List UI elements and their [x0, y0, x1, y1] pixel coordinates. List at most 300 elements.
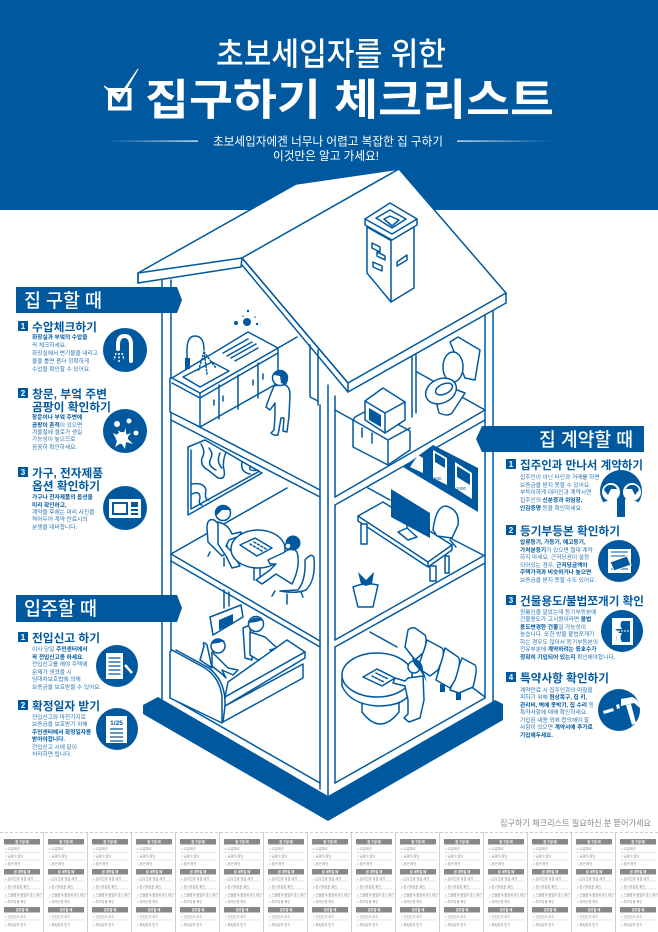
item: 확정일자: 주민센터에서 확정일자를: [32, 728, 91, 736]
tear-off checklist strip: □ 특약사항 확인: [181, 899, 202, 904]
tear-off checklist strip: 입주할 때: [544, 907, 556, 912]
scene: community center counter: [170, 590, 305, 723]
item: 곰팡이 확인: 겨울철에 결로가 생길: [32, 428, 82, 436]
item: 옵션 확인: 찍어두어 계약 만료시의: [32, 515, 88, 523]
tear-off checklist strip: □ 전입신고 하기: [93, 914, 114, 919]
tear-off checklist strip: □ 곰팡이 확인: [137, 854, 155, 858]
tear-off checklist strip: □ 등기부등본 확인: [489, 884, 513, 889]
tear-off checklist strip: □ 옵션 확인: [401, 861, 416, 866]
scene: kitchen: [170, 310, 290, 435]
item: 수압체크하기: 화장실과 부엌의 수압을: [32, 333, 88, 341]
tear-off checklist strip: 집 구할 때: [279, 839, 293, 844]
item: 건물용도: 원룸인줄 알았는데 등기부등본에: [520, 608, 596, 616]
tear-off checklist strip: □ 집주인과 직접 계약: [5, 876, 33, 881]
tear-off checklist strip: □ 건물용도/불법쪼개기 확인: [137, 892, 174, 897]
tear-off checklist strip: □ 수압체크: [225, 846, 240, 851]
tear-off checklist strip: 집 구할 때: [499, 839, 513, 844]
item: 특약사항: 피하기 위해 원상복구, 집 키,: [520, 693, 587, 701]
tear-off checklist strip: □ 곰팡이 확인: [93, 854, 111, 858]
item: 전입신고: 1: [21, 633, 26, 642]
tear-off checklist strip: □ 확정일자 받기: [313, 922, 334, 927]
tear-off checklist strip: □ 확정일자 받기: [577, 922, 598, 927]
tear-off checklist strip: □ 특약사항 확인: [137, 899, 158, 904]
tear-off checklist strip: □ 건물용도/불법쪼개기 확인: [445, 892, 482, 897]
item: 건물용도: 높습니다. 또한 방을 불법쪼개기: [520, 630, 594, 638]
tear-off checklist strip: 입주할 때: [236, 907, 248, 912]
item: 등기부등본: 하지 마세요. 근저당권이 설정: [520, 553, 589, 561]
tear-off checklist strip: □ 특약사항 확인: [93, 899, 114, 904]
tear-off checklist strip: □ 수압체크: [489, 846, 504, 851]
scene: office: 1000: [456, 486, 467, 491]
tear-off checklist strip: □ 확정일자 받기: [181, 922, 202, 927]
tear-off checklist strip: □ 확정일자 받기: [225, 922, 246, 927]
tear-off checklist strip: □ 등기부등본 확인: [533, 884, 557, 889]
tear-off checklist strip: □ 특약사항 확인: [489, 899, 510, 904]
item: 집주인 계약: 집주인이 아닌 타인과 거래를 하면: [520, 473, 600, 481]
tear-off checklist strip: □ 곰팡이 확인: [489, 854, 507, 858]
tear-off checklist strip: □ 옵션 확인: [621, 861, 636, 866]
tear-off checklist strip: □ 건물용도/불법쪼개기 확인: [357, 892, 394, 897]
item: 건물용도: 전유부분에 계약하려는 동호수가: [520, 645, 597, 653]
scene: office: [353, 445, 478, 607]
tear-off checklist strip: □ 옵션 확인: [5, 861, 20, 866]
tear-off checklist strip: 입주할 때: [280, 907, 292, 912]
item: 건물용도: 하는 경우도 많아서 등기부등본의: [520, 638, 598, 646]
tear-off checklist strip: □ 확정일자 받기: [93, 922, 114, 927]
item: 건물용도: 용도변경한 건물일 가능성이: [520, 623, 586, 631]
tear-off checklist strip: □ 전입신고 하기: [533, 914, 554, 919]
tear-off checklist strip: 입주할 때: [60, 907, 72, 912]
tear-off checklist strip: □ 집주인과 직접 계약: [357, 876, 385, 881]
tear-off checklist strip: □ 특약사항 확인: [5, 899, 26, 904]
item: 곰팡이 확인: 곰팡이 확인하기: [32, 400, 111, 414]
tear-off checklist strip: □ 수압체크: [137, 846, 152, 851]
tear-off checklist strip: □ 집주인과 직접 계약: [401, 876, 429, 881]
tear-off checklist strip: □ 옵션 확인: [93, 861, 108, 866]
tear-off checklist strip: □ 등기부등본 확인: [49, 884, 73, 889]
item: 확정일자: 받아야합니다.: [32, 735, 65, 743]
tear-off checklist strip: 집 구할 때: [543, 839, 557, 844]
item: 확정일자: 전입신고 시에 같이: [32, 743, 77, 751]
base slab: [143, 697, 503, 821]
banner: 입주할 때: 입주할 때: [24, 598, 97, 620]
tear-off checklist strip: 입주할 때: [412, 907, 424, 912]
icon: microwave: [103, 486, 147, 530]
tear-off note: 집구하기 체크리스트 필요하신 분 뜯어가세요: [500, 818, 651, 828]
item: 등기부등본: 되어있는 경우, 근저당금액이: [520, 561, 588, 569]
tear-off checklist strip: 입주할 때: [324, 907, 336, 912]
item: 곰팡이 확인: 2: [21, 389, 26, 398]
tear-off checklist strip: □ 건물용도/불법쪼개기 확인: [225, 892, 262, 897]
man seated right: [256, 536, 314, 604]
item: 등기부등본: 주택가격과 비슷하거나 높으면: [520, 568, 591, 576]
item: 특약사항: 기입된 내용 외에 합의해야 할: [520, 716, 590, 724]
item: 수압체크하기: 수압을 확인할 수 있어요.: [32, 365, 91, 373]
item: 등기부등본: 2: [509, 526, 514, 535]
tear-off checklist strip: 집 계약할 때: [190, 869, 206, 874]
item: 곰팡이 확인: 창문, 부엌 주변: [32, 387, 107, 401]
tear-off checklist strip: □ 확정일자 받기: [269, 922, 290, 927]
tear-off checklist strip: □ 옵션 확인: [225, 861, 240, 866]
tear-off checklist strip: □ 건물용도/불법쪼개기 확인: [313, 892, 350, 897]
roof: [138, 169, 506, 392]
tear-off checklist strip: □ 집주인과 직접 계약: [49, 876, 77, 881]
item: 확정일자: 처리하면 됩니다.: [32, 750, 72, 758]
tear-off checklist strip: 입주할 때: [148, 907, 160, 912]
tear-off checklist strip: □ 특약사항 확인: [401, 899, 422, 904]
tear-off checklist strip: □ 곰팡이 확인: [5, 854, 23, 858]
item: 집주인 계약: 보증금을 받지 못할 수 있어요.: [520, 481, 591, 489]
item: 수압체크하기: 화장실에서 변기물을 내리고: [32, 349, 98, 357]
item: 전입신고: 전입신고 하기: [32, 631, 100, 645]
tear-off checklist strip: 집 구할 때: [103, 839, 117, 844]
tear-off checklist strip: 집 구할 때: [147, 839, 161, 844]
tear-off checklist strip: □ 옵션 확인: [137, 861, 152, 866]
tear-off checklist strip: □ 등기부등본 확인: [137, 884, 161, 889]
item: 특약사항: 특약사항 확인하기: [520, 671, 609, 685]
tear-off checklist strip: □ 확정일자 받기: [357, 922, 378, 927]
tear-off checklist strip: □ 확정일자 받기: [445, 922, 466, 927]
tear-off checklist strip: 집 계약할 때: [14, 869, 30, 874]
item: 전입신고: [18, 631, 138, 691]
tear-off checklist strip: 집 구할 때: [587, 839, 601, 844]
tear-off checklist strip: □ 특약사항 확인: [225, 899, 246, 904]
item: 수압체크하기: 수압체크하기: [32, 320, 97, 334]
item: 전입신고: 꼭 전입신고를 하세요.: [32, 653, 84, 661]
tear-off checklist strip: □ 집주인과 직접 계약: [181, 876, 209, 881]
item: 옵션 확인: [18, 466, 147, 531]
tear-off checklist strip: 집 구할 때: [191, 839, 205, 844]
tear-off checklist strip: □ 곰팡이 확인: [577, 854, 595, 858]
tear-off checklist strip: □ 곰팡이 확인: [621, 854, 639, 858]
item: 확정일자: 확정일자 받기: [32, 699, 100, 713]
banner: 집 구할 때: [16, 287, 182, 313]
tear-off checklist strip: □ 곰팡이 확인: [313, 854, 331, 858]
tear-off checklist strip: □ 곰팡이 확인: [269, 854, 287, 858]
tear-off checklist strip: □ 전입신고 하기: [49, 914, 70, 919]
banner: 입주할 때: [16, 595, 182, 622]
tear-off checklist strip: □ 확정일자 받기: [5, 922, 26, 927]
panel: left column: [16, 287, 182, 758]
tear-off checklist strip: □ 등기부등본 확인: [93, 884, 117, 889]
tear-off checklist strip: □ 전입신고 하기: [137, 914, 158, 919]
tear-off checklist strip: 집 구할 때: [455, 839, 469, 844]
tear-off checklist strip: 집 구할 때: [631, 839, 645, 844]
item: 특약사항: 4: [509, 673, 514, 682]
subtitle: 초보세입자에겐 너무나 어렵고 복잡한 집 구하기: [213, 134, 443, 148]
tear-off checklist strip: 입주할 때: [456, 907, 468, 912]
tear-off checklist strip: □ 옵션 확인: [357, 861, 372, 866]
woman seated left: [207, 506, 241, 568]
item: 집주인 계약: [506, 458, 646, 518]
item: 옵션 확인: 가구나 전자제품의 옵션을: [32, 493, 93, 501]
tear-off checklist strip: 집 계약할 때: [630, 869, 646, 874]
tear-off checklist strip: □ 집주인과 직접 계약: [445, 876, 473, 881]
tear-off checklist strip: □ 집주인과 직접 계약: [225, 876, 253, 881]
item: 건물용도: 건물용도/불법쪼개기 확인: [520, 594, 644, 608]
tear-off checklist strip: □ 옵션 확인: [49, 861, 64, 866]
tear-off checklist strip: □ 특약사항 확인: [313, 899, 334, 904]
tear-off checklist strip: □ 전입신고 하기: [225, 914, 246, 919]
scene: consultation table: [342, 628, 476, 724]
tear-off checklist strip: □ 건물용도/불법쪼개기 확인: [269, 892, 306, 897]
tear-off checklist strip: 집 구할 때: [235, 839, 249, 844]
item: 특약사항: 기입해두세요.: [520, 731, 553, 739]
scene: meeting room: [188, 440, 314, 604]
tear-off checklist strip: □ 집주인과 직접 계약: [137, 876, 165, 881]
tear-off checklist strip: □ 건물용도/불법쪼개기 확인: [49, 892, 86, 897]
tear-off checklist strip: □ 특약사항 확인: [621, 899, 642, 904]
item: 등기부등본: [506, 524, 640, 584]
item: 수압체크하기: 물을 틀면 좀더 정확하게: [32, 357, 89, 365]
item: 옵션 확인: 3: [21, 468, 26, 477]
tear-off checklist strip: □ 특약사항 확인: [357, 899, 378, 904]
scene: toilet and microwave: [353, 337, 480, 465]
tear-off checklist strip: □ 확정일자 받기: [49, 922, 70, 927]
tear-off checklist strip: □ 집주인과 직접 계약: [489, 876, 517, 881]
item: 특약사항: 관리비, 벽에 못박기, 집 수리 등: [520, 701, 594, 709]
item: 곰팡이 확인: [18, 387, 147, 453]
icon: two people facing: [596, 470, 646, 518]
icon: mold spots: [103, 409, 147, 453]
tear-off checklist strip: □ 건물용도/불법쪼개기 확인: [489, 892, 526, 897]
tear-off checklist strip: □ 전입신고 하기: [357, 914, 378, 919]
banner: 집 계약할 때: [476, 426, 644, 452]
icon: document and pencil: [96, 645, 138, 687]
tear-off checklist strip: □ 건물용도/불법쪼개기 확인: [401, 892, 438, 897]
tear-off checklist strip: □ 전입신고 하기: [489, 914, 510, 919]
icon: wall crack plan: [601, 610, 643, 652]
tear-off checklist strip: □ 옵션 확인: [313, 861, 328, 866]
tear-off checklist strip: □ 수압체크: [49, 846, 64, 851]
item: 집주인 계약: 1: [509, 460, 514, 469]
subtitle: 이것만은 알고 가세요!: [273, 149, 379, 163]
item: 특약사항: 계약만료 시 집주인과의 마찰을: [520, 686, 593, 694]
tear-off checklist strip: □ 건물용도/불법쪼개기 확인: [5, 892, 42, 897]
tear-off checklist strip: □ 전입신고 하기: [401, 914, 422, 919]
item: 건물용도: 건물용도가 고시원이라면 불법: [520, 615, 591, 623]
item: 수압체크하기: 꼭 체크하세요.: [32, 341, 67, 349]
tear-off checklist strip: 집 계약할 때: [586, 869, 602, 874]
item: 곰팡이 확인: 창문이나 부엌 주변에: [32, 413, 82, 421]
icon: hammer and nail: [598, 689, 640, 731]
tear-off checklist strip: □ 수압체크: [577, 846, 592, 851]
walls and floors: [162, 280, 493, 796]
item: 확정일자: [18, 699, 138, 758]
tear-off checklist strip: □ 특약사항 확인: [269, 899, 290, 904]
item: 확정일자: 보증금을 보호받기 위해: [32, 720, 88, 728]
tear-off checklist strip: □ 등기부등본 확인: [357, 884, 381, 889]
tear-off checklist strip: □ 수압체크: [621, 846, 636, 851]
tear-off checklist strip: □ 옵션 확인: [181, 861, 196, 866]
tear-off checklist strip: 집 계약할 때: [278, 869, 294, 874]
item: 확정일자: 전입신고와 마찬가지로: [32, 713, 86, 721]
tear-off checklist strip: □ 곰팡이 확인: [181, 854, 199, 858]
item: 건물용도: [506, 594, 644, 661]
item: 특약사항: [506, 671, 640, 739]
tear-off checklist strip: 입주할 때: [500, 907, 512, 912]
item: 옵션 확인: 계약을 후에는 미리 사진을: [32, 508, 94, 516]
title line 1: 초보세입자를 위한: [216, 36, 446, 72]
item: 곰팡이 확인: 가능성이 높으므로: [32, 435, 75, 443]
tear-off checklist strip: □ 옵션 확인: [577, 861, 592, 866]
tear-off checklist strip: □ 옵션 확인: [445, 861, 460, 866]
item: 집주인 계약: 집주인과 만나서 계약하기: [520, 458, 643, 472]
item: 옵션 확인: 분쟁을 대비합니다.: [32, 523, 77, 531]
tear-off checklist strip: 입주할 때: [368, 907, 380, 912]
tear-off checklist strip: 입주할 때: [16, 907, 28, 912]
title line 2: 집구하기 체크리스트: [145, 77, 554, 125]
tear-off checklist strip: 집 계약할 때: [58, 869, 74, 874]
tear-off checklist strip: □ 수압체크: [357, 846, 372, 851]
item: 옵션 확인: 옵션 확인하기: [32, 479, 100, 493]
banner: 집 계약할 때: 집 계약할 때: [539, 429, 633, 451]
tear-off checklist strip: □ 곰팡이 확인: [49, 854, 67, 858]
item: 전입신고: 문제가 생겼을 시: [32, 668, 72, 676]
tear-off checklist strip: □ 수압체크: [445, 846, 460, 851]
tear-off checklist strip: □ 건물용도/불법쪼개기 확인: [181, 892, 218, 897]
tear-off checklist strip: 집 구할 때: [367, 839, 381, 844]
tear-off checklist strip: □ 등기부등본 확인: [577, 884, 601, 889]
tear-off checklist strip: □ 확정일자 받기: [621, 922, 642, 927]
tear-off checklist strip: □ 전입신고 하기: [621, 914, 642, 919]
tear-off checklist strip: □ 곰팡이 확인: [445, 854, 463, 858]
tear-off checklist strip: □ 집주인과 직접 계약: [577, 876, 605, 881]
item: 집주인 계약: 집주인의 신분증과 위임장,: [520, 496, 583, 504]
tear-off checklist strip: 집 계약할 때: [410, 869, 426, 874]
tear-off checklist strip: □ 집주인과 직접 계약: [93, 876, 121, 881]
tear-off checklist strip: □ 확정일자 받기: [533, 922, 554, 927]
tear-off checklist strip: □ 확정일자 받기: [401, 922, 422, 927]
tear-off checklist strip: □ 확정일자 받기: [489, 922, 510, 927]
tear-off checklist strip: □ 수압체크: [401, 846, 416, 851]
tear-off checklist strip: 집 계약할 때: [498, 869, 514, 874]
tear-off checklist strip: □ 전입신고 하기: [577, 914, 598, 919]
tear-off checklist strip: □ 등기부등본 확인: [621, 884, 645, 889]
tear-off checklist strip: 집 계약할 때: [542, 869, 558, 874]
item: 집주인 계약: 부득이하게 대리인과 계약시엔: [520, 488, 591, 496]
item: 특약사항: 사항이 있으면 계약서에 추가로: [520, 723, 593, 731]
tear-off checklist strip: □ 등기부등본 확인: [269, 884, 293, 889]
icon: dated document: 1/25: [110, 720, 123, 727]
item: 건물용도: 정확히 기입되어 있는지 확인해야합니다.: [520, 653, 616, 661]
tear-off checklist strip: 입주할 때: [192, 907, 204, 912]
tear-off checklist strip: □ 곰팡이 확인: [401, 854, 419, 858]
item: 전입신고: 임대차보호법에 의해: [32, 675, 81, 683]
tear-off checklist strip: □ 곰팡이 확인: [533, 854, 551, 858]
tear-off checklist strip: [0, 832, 658, 932]
tear-off checklist strip: □ 전입신고 하기: [181, 914, 202, 919]
banner: 집 구할 때: 집 구할 때: [24, 290, 102, 312]
tear-off checklist strip: □ 등기부등본 확인: [5, 884, 29, 889]
tear-off checklist strip: 집 구할 때: [15, 839, 29, 844]
tear-off checklist strip: □ 집주인과 직접 계약: [313, 876, 341, 881]
chimney: [365, 203, 417, 302]
tear-off checklist strip: 입주할 때: [104, 907, 116, 912]
tear-off checklist strip: 집 계약할 때: [146, 869, 162, 874]
tear-off checklist strip: □ 수압체크: [313, 846, 328, 851]
tear-off checklist strip: □ 수압체크: [5, 846, 20, 851]
tear-off checklist strip: □ 특약사항 확인: [577, 899, 598, 904]
tear-off checklist strip: □ 집주인과 직접 계약: [533, 876, 561, 881]
tear-off checklist strip: □ 집주인과 직접 계약: [269, 876, 297, 881]
tear-off checklist strip: □ 특약사항 확인: [533, 899, 554, 904]
illustration: house cutaway: [138, 169, 506, 821]
item: 등기부등본: 보증금을 받지 못할 수도 있어요.: [520, 576, 596, 584]
item: 집주인 계약: 인감증명 등을 확인하세요.: [520, 504, 583, 512]
tear-off checklist strip: □ 전입신고 하기: [5, 914, 26, 919]
tear-off checklist strip: 집 구할 때: [411, 839, 425, 844]
item: 등기부등본: 가처분등기가 있으면 절대 계약: [520, 546, 594, 554]
tear-off checklist strip: □ 수압체크: [533, 846, 548, 851]
tear-off checklist strip: 집 계약할 때: [234, 869, 250, 874]
header band: [0, 0, 658, 210]
item: 옵션 확인: 미리 확인하고,: [32, 501, 67, 509]
tear-off checklist strip: □ 건물용도/불법쪼개기 확인: [577, 892, 614, 897]
item: 전입신고: 전입신고를 해야 주택에: [32, 660, 88, 668]
item: 전입신고: 보증금을 보호받을 수 있어요.: [32, 683, 102, 691]
tear-off checklist strip: □ 등기부등본 확인: [181, 884, 205, 889]
panel: right column: [476, 426, 646, 739]
tear-off checklist strip: □ 곰팡이 확인: [225, 854, 243, 858]
tear-off checklist strip: □ 특약사항 확인: [49, 899, 70, 904]
tear-off checklist strip: □ 특약사항 확인: [445, 899, 466, 904]
tear-off checklist strip: □ 확정일자 받기: [137, 922, 158, 927]
tear-off checklist strip: 집 계약할 때: [366, 869, 382, 874]
tear-off checklist strip: □ 옵션 확인: [489, 861, 504, 866]
tear-off checklist strip: 집 계약할 때: [102, 869, 118, 874]
tear-off checklist strip: □ 등기부등본 확인: [401, 884, 425, 889]
tear-off checklist strip: □ 등기부등본 확인: [225, 884, 249, 889]
item: 등기부등본: 압류등기, 가등기, 예고등기,: [520, 538, 586, 546]
icon: register document with stamp: [598, 540, 640, 582]
tear-off checklist strip: □ 등기부등본 확인: [445, 884, 469, 889]
tear-off checklist strip: 집 구할 때: [59, 839, 73, 844]
tear-off checklist strip: □ 수압체크: [93, 846, 108, 851]
tear-off checklist strip: □ 건물용도/불법쪼개기 확인: [533, 892, 570, 897]
item: 곰팡이 확인: 꼼꼼히 확인하세요.: [32, 443, 77, 451]
tear-off checklist strip: □ 수압체크: [269, 846, 284, 851]
tear-off checklist strip: □ 건물용도/불법쪼개기 확인: [621, 892, 658, 897]
tear-off checklist strip: 입주할 때: [632, 907, 644, 912]
tear-off checklist strip: □ 전입신고 하기: [313, 914, 334, 919]
tear-off checklist strip: □ 옵션 확인: [269, 861, 284, 866]
item: 확정일자: 2: [21, 701, 26, 710]
item: 곰팡이 확인: 곰팡이 흔적이 있으면: [32, 421, 82, 429]
tear-off checklist strip: □ 건물용도/불법쪼개기 확인: [93, 892, 130, 897]
icon: shower faucet: [103, 328, 147, 372]
tear-off checklist strip: □ 수압체크: [181, 846, 196, 851]
item: 특약사항: 특약사항에 대해 확인하세요.: [520, 708, 588, 716]
scene: office: 500: [434, 476, 442, 481]
tear-off checklist strip: □ 등기부등본 확인: [313, 884, 337, 889]
item: 등기부등본: 등기부등본 확인하기: [520, 524, 620, 538]
tear-off checklist strip: □ 곰팡이 확인: [357, 854, 375, 858]
item: 전입신고: 이사 당일 주민센터에서: [32, 645, 88, 653]
item: 건물용도: 3: [509, 596, 514, 605]
item: 수압체크하기: 1: [21, 322, 26, 331]
tear-off checklist strip: 입주할 때: [588, 907, 600, 912]
tear-off checklist strip: 집 계약할 때: [322, 869, 338, 874]
item: 수압체크하기: [18, 320, 147, 373]
person standing: [266, 370, 290, 435]
icon: checkbox: [104, 69, 138, 108]
tear-off checklist strip: □ 전입신고 하기: [445, 914, 466, 919]
item: 옵션 확인: 가구, 전자제품: [32, 466, 103, 480]
tear-off checklist strip: 집 구할 때: [323, 839, 337, 844]
icon: mold on wall: [234, 310, 258, 326]
subtitle: [213, 134, 443, 163]
